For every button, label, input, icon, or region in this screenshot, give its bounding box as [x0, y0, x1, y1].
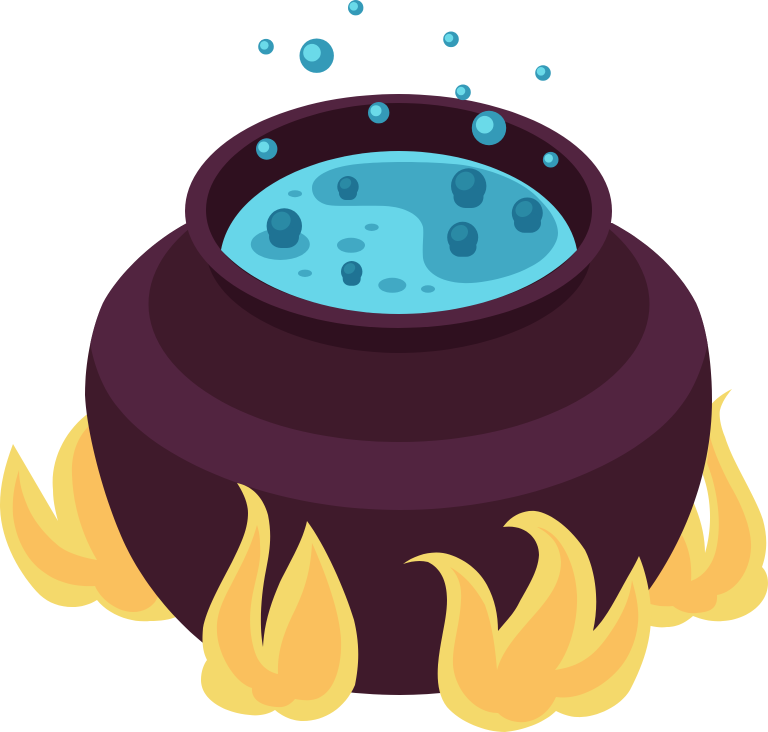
cauldron interior	[206, 103, 592, 313]
blob: top right large	[451, 168, 486, 208]
liquid ripples	[251, 190, 435, 293]
blob: bottom small	[341, 261, 362, 286]
rising bubbles	[256, 0, 558, 168]
cauldron rim	[185, 94, 612, 328]
flames: front right	[403, 511, 651, 732]
cauldron body	[85, 94, 712, 695]
darker liquid pool	[312, 162, 558, 283]
flames: back right	[640, 389, 768, 627]
surface blobs	[267, 168, 543, 286]
shadow under rim	[208, 240, 590, 353]
cauldron shoulder band	[90, 223, 708, 510]
potion liquid	[221, 151, 577, 314]
flames: front left	[201, 483, 358, 721]
flames: back left	[0, 412, 200, 621]
blob: centre medium	[447, 222, 478, 257]
blob: top small	[337, 176, 359, 200]
cauldron upper dark dome	[148, 166, 650, 442]
blob: left large	[267, 208, 302, 248]
blob: right medium	[512, 198, 543, 233]
